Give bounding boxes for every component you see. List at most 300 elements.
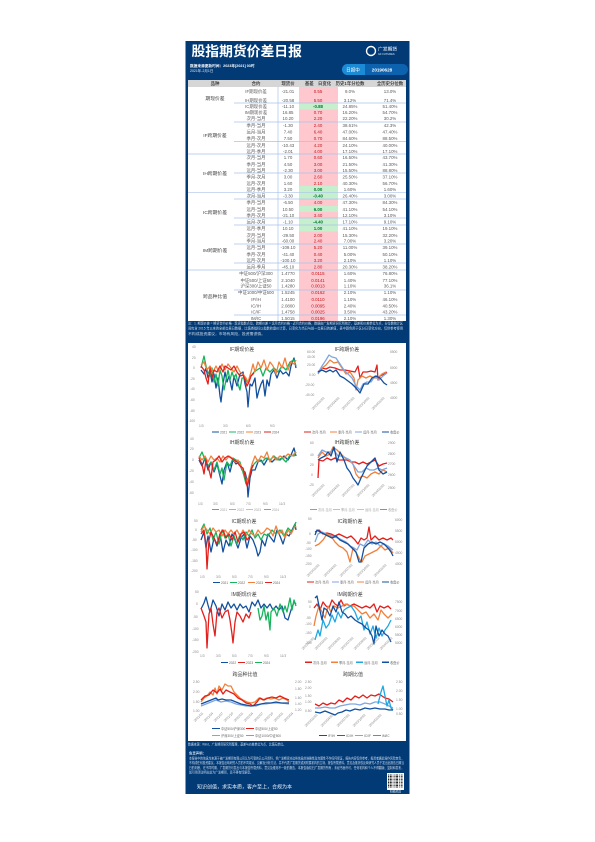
table header: 合约 — [252, 80, 261, 87]
chart: IC calendar spread: IC跨期价差 — [337, 518, 363, 525]
chart: IC calendar spread: 远月-当月 — [365, 580, 379, 584]
table rows: 1.10% — [384, 258, 396, 263]
chart: cross-variety ratio: 2021/07 — [213, 711, 224, 723]
table rows: 5.50 — [314, 98, 323, 103]
table rows: -6.50 — [283, 200, 294, 205]
chart: IC calendar spread: 50 — [308, 517, 312, 521]
table rows: -60.00 — [282, 239, 295, 244]
chart: IC basis seasonal: -50 — [192, 538, 197, 542]
table rows: -1.30 — [283, 123, 294, 128]
chart: IH calendar spread: 20 — [310, 463, 314, 467]
chart: main contract ratio: 2023/04/03 — [320, 713, 334, 728]
table rows: 22.20% — [343, 116, 358, 121]
chart: IM calendar spread: -100 — [305, 622, 312, 626]
chart: IH basis seasonal: 5/3 — [230, 502, 235, 506]
table header: 品种 — [211, 80, 220, 87]
chart: IC basis seasonal: 50 — [194, 519, 198, 523]
table rows: IF期现价差 — [245, 88, 267, 95]
table header: 现货价 — [281, 80, 295, 87]
chart: IM basis seasonal: 2024 — [263, 661, 270, 665]
chart: IH calendar spread: 2600 — [388, 473, 396, 477]
table rows: IC/IF — [251, 310, 261, 315]
chart: IC calendar spread: -100 — [305, 547, 312, 551]
group labels: IF跨期价差 — [203, 132, 227, 139]
table rows: 1.4280 — [281, 284, 295, 289]
chart: IF basis seasonal: 2023 — [254, 430, 261, 434]
table rows: 10.50 — [282, 207, 294, 212]
table rows: -3.30 — [283, 194, 294, 199]
chart: main contract ratio: 1.00 — [305, 700, 312, 704]
table rows: 远月-季月 — [246, 264, 266, 271]
table rows: 1.60% — [344, 187, 356, 192]
icon: QR code: 扫码关注 — [390, 790, 401, 794]
chart: main contract ratio: IF/IH — [328, 734, 336, 738]
table rows: 17.10% — [343, 149, 358, 154]
chart: IH calendar spread: 收盘价 — [388, 507, 398, 512]
chart: IF calendar spread: 收盘价 — [390, 430, 400, 434]
table rows: 远月-次月 — [246, 180, 266, 187]
table rows: 4.00 — [314, 149, 323, 154]
table rows: 1.10% — [344, 297, 356, 302]
chart: IM calendar spread: 7000 — [395, 609, 403, 613]
chart: IH basis seasonal: IH期现价差 — [229, 439, 255, 446]
table rows: 0.0110 — [311, 297, 325, 302]
chart: IF basis seasonal: 6/3 — [246, 424, 251, 428]
chart: cross-variety ratio: 2022/04 — [243, 711, 254, 723]
table rows: 2.00 — [314, 233, 323, 238]
table rows — [238, 88, 398, 321]
table rows: 次月-当月 — [246, 193, 266, 200]
chart: IM calendar spread: 6000 — [395, 625, 403, 629]
table rows: 远月-次月 — [246, 219, 266, 226]
chart: main contract ratio — [304, 671, 403, 738]
chart: IF calendar spread: 40.00 — [307, 355, 315, 359]
table rows: 季月-次月 — [246, 251, 266, 258]
chart: IF calendar spread: -40.00 — [305, 393, 315, 397]
table rows: 88.50% — [383, 136, 398, 141]
chart: IM basis seasonal: -50 — [193, 615, 198, 619]
chart: IH calendar spread: 40 — [310, 453, 314, 457]
table rows: 远月-次月 — [246, 142, 266, 149]
table rows: 84.60% — [343, 136, 358, 141]
table rows: -41.40 — [282, 252, 295, 257]
table rows: 次月-当月 — [246, 232, 266, 239]
chart: IM calendar spread: 2024/01/03 — [379, 636, 393, 651]
table rows: -1.10 — [283, 220, 294, 225]
chart: IF calendar spread: 2023/01/03 — [311, 396, 325, 411]
table rows: 30.2% — [384, 116, 396, 121]
chart: IM calendar spread: 2023/11/03 — [366, 636, 380, 651]
chart: IF basis seasonal: 0 — [193, 366, 195, 370]
table rows: 25.50% — [343, 174, 358, 180]
chart: IM basis seasonal: -150 — [192, 638, 199, 642]
chart: cross-variety ratio: 2022/07 — [253, 711, 264, 723]
table rows: 2.0800 — [281, 304, 295, 309]
chart: IF calendar spread: 2023/10/03 — [356, 396, 370, 411]
chart: IM calendar spread: 0 — [309, 605, 311, 609]
table rows: 0.0162 — [311, 290, 325, 295]
footnote — [188, 320, 404, 336]
logo: company: GF FUTURES — [378, 52, 395, 56]
chart: cross-variety ratio: 2021/01 — [193, 711, 204, 723]
table rows: 40.30% — [343, 181, 358, 186]
table rows: -4.40 — [313, 220, 324, 225]
chart: cross-variety ratio: 2022/10 — [263, 711, 274, 723]
table rows: 10.20 — [282, 116, 294, 121]
table rows: 24.10% — [343, 143, 358, 148]
chart: main contract ratio: 2024/01/03 — [368, 713, 382, 728]
chart: IC basis seasonal — [191, 518, 296, 585]
chart: IC basis seasonal: 0 — [195, 528, 197, 532]
table rows: 3.40 — [314, 213, 323, 218]
table rows: 51.40% — [383, 104, 398, 109]
table rows: 16.20% — [343, 110, 358, 115]
table rows: 54.10% — [383, 207, 398, 212]
table rows: 24.85% — [343, 104, 358, 109]
table rows: 远月-次月 — [246, 257, 266, 264]
chart: IH calendar spread: 2800 — [388, 452, 396, 456]
chart: IF calendar spread: 2023/04/03 — [326, 396, 340, 411]
chart: IM calendar spread: 2023/01/03 — [301, 636, 315, 651]
table rows: 47.40% — [383, 130, 398, 134]
table rows: -0.40 — [313, 194, 324, 199]
table rows: 季月-当月 — [246, 199, 266, 206]
chart: IF basis seasonal: 2024 — [272, 430, 279, 434]
table header — [211, 80, 404, 87]
table rows: 41.10% — [343, 207, 358, 212]
table rows: 季月-当月 — [246, 161, 266, 168]
group labels: 跨品种比值 — [203, 293, 227, 300]
disclaimer — [189, 750, 404, 774]
chart: IF calendar spread: -20.00 — [305, 383, 315, 387]
chart: cross-variety ratio: 1.00 — [193, 709, 200, 713]
table rows: 远月-季月 — [246, 225, 266, 232]
chart: IM basis seasonal: 11/3 — [280, 654, 286, 658]
table rows: 47.00% — [343, 130, 358, 134]
chart: IM basis seasonal: -100 — [192, 627, 199, 631]
table rows: 1.5245 — [281, 290, 295, 295]
chart: cross-variety ratio: 1.20 — [295, 708, 302, 712]
chart: cross-variety ratio: 2021/04 — [203, 711, 214, 723]
chart: IM calendar spread: 远月-当月 — [364, 660, 378, 665]
subtitle: data note: 2021年-2月1日 — [190, 68, 213, 73]
chart: IF calendar spread: 季月-当月 — [338, 430, 352, 434]
table rows: 88.80% — [383, 168, 398, 173]
chart: main contract ratio: 1.50 — [396, 698, 403, 702]
chart: IF calendar spread: 20.00 — [307, 363, 315, 367]
chart: IF calendar spread — [304, 346, 400, 434]
chart: IM calendar spread: -150 — [305, 631, 312, 635]
chart: IC basis seasonal: 7/3 — [248, 575, 253, 579]
table rows: 38.61% — [343, 123, 358, 128]
chart: IM basis seasonal — [192, 590, 296, 665]
group labels: IM跨期价差 — [203, 247, 227, 254]
chart: IH basis seasonal: -40 — [189, 480, 194, 484]
table rows: 3.20 — [314, 258, 323, 263]
footnote: 不构成投资建议，市场有风险，投资需谨慎。 — [188, 331, 265, 336]
table rows: -100.10 — [281, 258, 296, 263]
table rows: 76.80% — [383, 271, 398, 276]
chart: IM calendar spread: -50 — [306, 616, 311, 620]
chart: IC basis seasonal: 3/3 — [216, 575, 221, 579]
table rows: 1.60% — [344, 271, 356, 276]
chart: IC calendar spread: 次月-当月 — [315, 580, 329, 584]
chart: IM calendar spread: -200 — [305, 641, 312, 645]
table rows: 0.00 — [314, 187, 323, 192]
footnote: 注：1. 期现价差 = 期货合约价格 - 现货指数点位，跨期价差 = 远月合约价格 - 近月合约价格，数据由广发期货研究所统计，基差和价差单位为点，分位数统计区 — [188, 320, 404, 326]
table rows: 3.00 — [314, 168, 323, 173]
chart: IH calendar spread: 远月-当月 — [365, 507, 379, 512]
chart: IC calendar spread: 2024/01/03 — [373, 563, 387, 578]
disclaimer: 日的判断，在不同时期，广发期货可发出与本报告所载资料、意见及推测不一致的报告，本报告版权归广发期货所有，未经书面许可，任何机构和个人不得翻版、复制和发布， — [189, 765, 404, 770]
chart: IM calendar spread: 收盘价 — [390, 660, 400, 665]
table rows: 3.00% — [384, 194, 396, 199]
date pill — [342, 64, 408, 75]
table rows: 2.40 — [314, 239, 323, 244]
table rows: 中证500/上证50 — [240, 277, 272, 284]
chart: IM basis seasonal: 5/3 — [232, 654, 237, 658]
table rows: 84.30% — [383, 200, 398, 205]
table rows: 36.1% — [384, 284, 396, 289]
chart: IH calendar spread: 2500 — [388, 486, 396, 490]
chart: IF calendar spread: 4000 — [390, 396, 398, 400]
table rows: 远月-当月 — [246, 244, 266, 251]
table rows: 1.40% — [344, 278, 356, 283]
table header: 全历史分位数 — [377, 80, 404, 87]
table rows: 41.10% — [343, 226, 358, 231]
panel: report background — [186, 41, 410, 794]
chart: cross-variety ratio: 中证500/沪深300 — [221, 726, 245, 731]
chart: IM calendar spread: 次月-当月 — [313, 660, 327, 665]
chart: main contract ratio: 2.00 — [396, 689, 403, 693]
table rows: 2.10 — [314, 181, 323, 186]
chart: IH calendar spread — [309, 439, 398, 512]
chart: IF basis seasonal: 40 — [192, 345, 196, 349]
table rows: 次月-当月 — [246, 154, 266, 161]
chart: IH calendar spread: IH跨期价差 — [334, 439, 360, 446]
source line: 数据来源：Wind，广发期货研究所整理，基差与价差单位为点，比值无单位。 — [188, 742, 286, 746]
table rows: 5.00% — [344, 252, 356, 257]
chart: cross-variety ratio — [193, 671, 302, 738]
table rows: 沪深300/上证50 — [240, 283, 272, 290]
subtitle: data note — [190, 63, 255, 73]
table rows: 2.10% — [344, 258, 356, 263]
table rows: 2.40% — [344, 304, 356, 309]
chart: IC calendar spread: 4500 — [395, 551, 403, 555]
table rows: 远月-季月 — [246, 186, 266, 193]
chart: IH calendar spread: 2024/01/03 — [371, 483, 385, 498]
table rows: 远月-当月 — [246, 167, 266, 174]
table rows: IC/IH — [251, 304, 261, 309]
table rows: 季月-次月 — [246, 135, 266, 142]
table rows: 0.40 — [314, 252, 323, 257]
table rows: 季月-当月 — [246, 238, 266, 245]
chart: IF calendar spread: 远月-当月 — [363, 430, 377, 434]
chart: cross-variety ratio: 中证500/上证50 — [255, 726, 278, 731]
table rows: 1.4770 — [281, 271, 295, 276]
date pill: 日报中 — [346, 66, 360, 74]
chart: IC calendar spread: 2023/01/03 — [306, 563, 320, 578]
chart: IF calendar spread: 2023/07/03 — [341, 396, 355, 411]
table rows: 3.20% — [384, 239, 396, 244]
chart: IM calendar spread: 2023/05/03 — [327, 636, 341, 651]
table rows: 2.60 — [314, 174, 323, 180]
chart: IH basis seasonal: -60 — [189, 491, 194, 495]
table rows: 中证500/沪深300 — [239, 270, 273, 277]
chart: IF basis seasonal: -40 — [190, 387, 195, 391]
chart: IM calendar spread — [301, 591, 403, 665]
chart: main contract ratio: IM/IC — [382, 734, 390, 738]
table rows: IH期现价差 — [245, 97, 268, 104]
table rows: 40.50% — [383, 304, 398, 309]
table rows: 47.30% — [343, 200, 358, 205]
chart: IH calendar spread: 2700 — [388, 462, 396, 466]
chart: main contract ratio: 2023/07/03 — [336, 713, 350, 728]
disclaimer: 本报告中的信息均来源于被广发期货有限公司认为可靠的已公开资料，但广发期货对这些信息的准确性及完整性不作任何保证，报告内容仅供参考，投资者据此操作风险自负， — [189, 756, 404, 760]
chart: IH basis seasonal: 11/3 — [279, 502, 285, 506]
table rows: 0.0141 — [311, 278, 325, 283]
table rows: 38.20% — [383, 265, 398, 270]
table rows: 远月-当月 — [246, 206, 266, 213]
chart: IF basis seasonal: 2022 — [237, 430, 244, 434]
chart: IC basis seasonal: 2024 — [273, 581, 280, 585]
table rows: -11.10 — [282, 104, 295, 109]
table rows: 次月-当月 — [246, 115, 266, 122]
disclaimer: 如引用须注明出处为广发期货，且不得有悖原意。 — [189, 770, 253, 774]
footnote: 间包含 2015 年以来的全部交易日数据，比值类指标以指数收盘价计算，日变化为当日与前一交易日的差值，表中颜色用于区分日变化方向，仅供参考使用 — [188, 326, 403, 330]
table rows: 0.0196 — [311, 316, 325, 321]
table rows: 0.70 — [314, 110, 323, 115]
chart: IH basis seasonal: 7/3 — [246, 502, 251, 506]
chart: IH calendar spread: 季月-当月 — [341, 507, 355, 512]
table rows: -29.50 — [282, 233, 295, 238]
table rows: 54.70% — [383, 110, 398, 115]
table rows: 2.20 — [314, 116, 323, 121]
table rows: 32.20% — [383, 233, 398, 238]
table rows: 9.0% — [345, 89, 355, 94]
chart: IC basis seasonal: 2022 — [238, 581, 245, 585]
chart: IH basis seasonal: 9/3 — [263, 502, 268, 506]
table rows: 0.0013 — [311, 284, 325, 289]
chart: IM basis seasonal: 2022 — [229, 661, 236, 665]
chart: main contract ratio: 2023/10/03 — [352, 713, 366, 728]
table rows: IM期现价差 — [245, 109, 268, 116]
table rows: 9.10% — [384, 220, 396, 225]
table rows: 7.50 — [284, 136, 293, 141]
table rows: 季月-次月 — [246, 174, 266, 180]
table rows: 7.00% — [344, 239, 356, 244]
table rows: 1.10% — [384, 290, 396, 295]
chart: IM basis seasonal: 50 — [195, 590, 199, 594]
chart: IH basis seasonal: 40 — [190, 437, 194, 441]
chart: IH calendar spread: 2900 — [388, 441, 396, 445]
chart: main contract ratio: 2.50 — [396, 680, 403, 684]
table rows: 42.3% — [384, 123, 396, 128]
chart: IH basis seasonal: 3/3 — [213, 502, 218, 506]
chart: IF basis seasonal — [188, 345, 296, 434]
chart: IF calendar spread: 4500 — [390, 381, 398, 385]
table rows: 19.10% — [383, 226, 398, 231]
table rows: 6.00 — [314, 207, 323, 212]
table rows: 中证1000/中证500 — [238, 289, 274, 296]
table rows: -2.01 — [283, 149, 294, 154]
chart: IC calendar spread: 5500 — [395, 529, 403, 533]
table rows: 季月-次月 — [246, 212, 266, 219]
table rows: 2.40 — [314, 123, 323, 128]
chart: cross-variety ratio: 2023/04 — [283, 711, 294, 723]
table rows: 2.1040 — [281, 278, 295, 283]
chart: IM basis seasonal: 2023 — [246, 661, 253, 665]
table rows: 0.55 — [314, 89, 323, 94]
chart: IH basis seasonal: 2024 — [272, 508, 279, 512]
table rows: 13.0% — [384, 89, 396, 94]
chart: IC basis seasonal: -100 — [191, 548, 198, 552]
chart: cross-variety ratio: 跨品种比值 — [232, 671, 258, 678]
logo: company: 广发期货 — [378, 46, 397, 52]
table rows: 40.00% — [383, 143, 398, 148]
table rows: 1.60% — [384, 187, 396, 192]
chart: IF calendar spread: IF跨期价差 — [335, 346, 359, 353]
table rows: -2.30 — [283, 168, 294, 173]
chart: IH basis seasonal — [189, 437, 296, 512]
chart: IM calendar spread: 7500 — [395, 600, 403, 604]
table rows: 5.20 — [314, 245, 323, 250]
chart: IC basis seasonal: -150 — [191, 559, 198, 563]
table rows: 71.4% — [384, 98, 396, 103]
chart: IC basis seasonal: 2021 — [221, 581, 228, 585]
table rows: 15.30% — [343, 233, 358, 238]
table rows: 0.0115 — [311, 271, 325, 276]
table rows: 1.60 — [284, 181, 293, 186]
table rows: 3.12% — [344, 98, 356, 103]
chart: cross-variety ratio: 1.60 — [295, 696, 302, 700]
table rows: 1.30% — [384, 316, 396, 321]
table rows: 77.10% — [383, 278, 398, 283]
table rows: IF/IH — [251, 297, 261, 302]
table rows: 1.4100 — [281, 297, 295, 302]
table rows: IC期现价差 — [245, 103, 268, 110]
table rows: 3.10% — [384, 213, 396, 218]
table rows: 20.30% — [343, 265, 358, 270]
chart: IH basis seasonal: 2022 — [237, 508, 244, 512]
disclaimer: 不构成任何投资建议。本报告反映研究人员的不同观点、见解及分析方法，并不代表广发期货或其附属机构的立场，报告所载资料、意见及推测仅反映研究人员于发出此报告日期当 — [189, 760, 404, 765]
table rows: -20.58 — [282, 98, 295, 103]
table rows: 15.50% — [343, 168, 358, 173]
group labels: 期现价差 — [205, 95, 225, 102]
chart: IC basis seasonal: -200 — [191, 569, 198, 573]
chart: IM calendar spread: 2023/09/03 — [353, 636, 367, 651]
table rows: 1.4758 — [281, 310, 295, 315]
chart: IH basis seasonal: -20 — [189, 469, 194, 473]
group labels: IC跨期价差 — [203, 209, 227, 216]
chart: IC calendar spread — [305, 517, 403, 584]
chart: IH basis seasonal: 2023 — [254, 508, 261, 512]
chart: IF calendar spread: 5000 — [390, 366, 398, 370]
chart: main contract ratio: IC/IF — [364, 734, 371, 738]
chart: main contract ratio: 0.50 — [396, 712, 403, 716]
table rows: 37.10% — [383, 174, 398, 180]
table rows: 43.70% — [383, 155, 398, 160]
chart: cross-variety ratio: 1.50 — [193, 700, 200, 704]
table rows: 43.20% — [383, 310, 398, 315]
table rows: 17.10% — [343, 220, 358, 225]
table rows: 2.10% — [344, 316, 356, 321]
chart: IM calendar spread: IM跨期价差 — [337, 591, 363, 598]
chart: main contract ratio: 1.00 — [396, 707, 403, 711]
table rows: 1.10% — [344, 284, 356, 289]
table rows: 6.40 — [314, 130, 323, 134]
chart: IM calendar spread: 50 — [308, 600, 312, 604]
